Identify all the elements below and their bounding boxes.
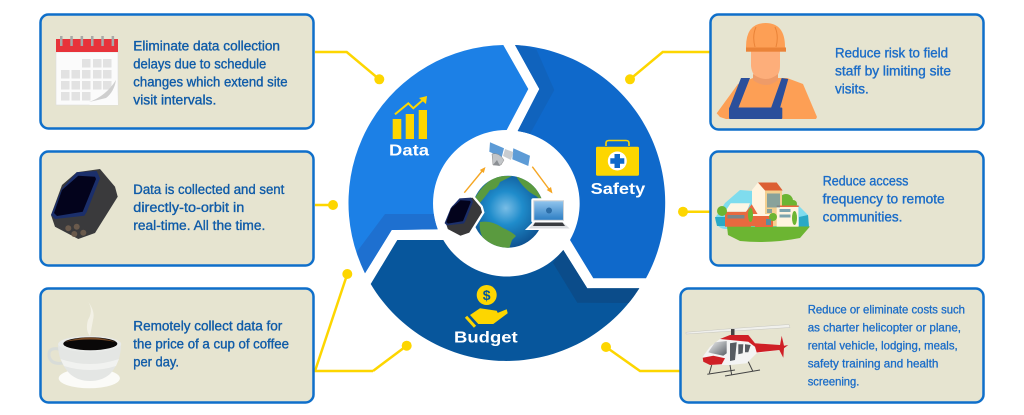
label: Safety: Safety xyxy=(591,181,646,198)
text: reduce costs: screening. xyxy=(808,374,859,388)
text: data collection delays: visit intervals. xyxy=(133,93,216,108)
panel: budget segment xyxy=(371,240,642,361)
text: reduce access: Reduce access xyxy=(823,174,909,189)
icon: town xyxy=(715,182,810,242)
text: reduce access: communities. xyxy=(823,210,902,225)
text: reduce costs: as charter helicopter or plane, xyxy=(808,320,961,334)
panel: device card xyxy=(40,152,314,266)
icon: satellite xyxy=(489,142,530,166)
icon: laptop xyxy=(527,199,572,229)
text: data collection delays xyxy=(133,39,288,108)
arrow: satellite to laptop xyxy=(532,167,552,194)
panel: safety segment xyxy=(510,42,665,278)
text: reduce access: frequency to remote xyxy=(823,192,945,207)
text: real-time data: real-time. All the time. xyxy=(133,218,265,233)
icon: bar chart with arrow xyxy=(393,96,427,139)
icon: globe xyxy=(475,176,542,248)
text: data collection delays: Eliminate data collection xyxy=(133,39,280,54)
text: reduce risk: visits. xyxy=(835,81,869,96)
icon: coffee cup xyxy=(49,298,121,388)
text: real-time data: directly-to-orbit in xyxy=(133,200,244,215)
icon: data device xyxy=(51,169,118,239)
text: price of coffee: the price of a cup of coffee xyxy=(133,337,289,352)
center graphic: satellite, globe, device, laptop xyxy=(445,142,572,252)
icon: hand with coin: $ xyxy=(483,287,491,303)
text: price of coffee: Remotely collect data for xyxy=(133,319,283,334)
text: reduce risk xyxy=(835,45,951,96)
label: Data: Data xyxy=(389,142,429,159)
panel: calendar card xyxy=(40,14,314,128)
panel: communities card xyxy=(710,152,984,266)
icon: helicopter xyxy=(686,324,790,376)
text: reduce costs: Reduce or eliminate costs such xyxy=(808,302,965,316)
panel: field staff card xyxy=(710,14,984,130)
text: price of coffee xyxy=(133,319,289,370)
text: reduce access xyxy=(823,174,945,225)
text: reduce costs: safety training and health xyxy=(808,356,938,370)
text: reduce risk: staff by limiting site xyxy=(835,63,951,78)
icon: small device xyxy=(445,196,483,237)
panel: data segment xyxy=(348,45,528,275)
text: reduce costs xyxy=(808,302,965,388)
panel: costs card xyxy=(680,288,984,402)
text: real-time data: Data is collected and sent xyxy=(133,182,285,197)
label: Budget: Budget xyxy=(454,330,518,347)
text: reduce risk: Reduce risk to field xyxy=(835,45,948,60)
connector lines xyxy=(315,52,710,371)
text: reduce costs: rental vehicle, lodging, meals, xyxy=(808,338,958,352)
icon: calendar xyxy=(56,36,118,105)
icon: hand with coin xyxy=(466,285,508,327)
text: price of coffee: per day. xyxy=(133,355,179,370)
panel: coffee card xyxy=(40,288,314,402)
icon: worker xyxy=(717,23,817,119)
text: data collection delays: delays due to schedule xyxy=(133,57,266,72)
arrow: device to satellite xyxy=(464,167,486,193)
text: data collection delays: changes which extend site xyxy=(133,75,288,90)
text: real-time data xyxy=(133,182,285,233)
icon: first aid case xyxy=(596,140,639,176)
